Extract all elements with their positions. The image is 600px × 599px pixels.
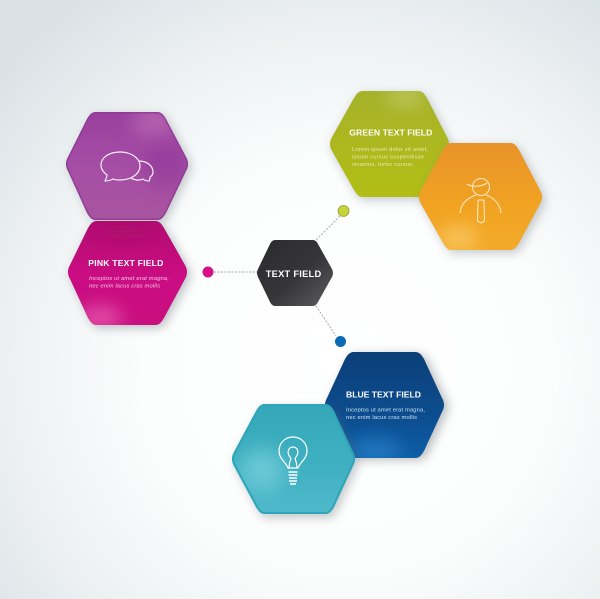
icon: man with tie — [460, 178, 501, 223]
panel: green hexagon — [330, 87, 451, 200]
panel: blue hexagon — [325, 352, 448, 462]
panel: pink hexagon — [68, 221, 190, 330]
panel: purple hexagon — [66, 106, 191, 223]
panel: central dark hexagon — [257, 240, 333, 306]
connector: pink — [214, 271, 258, 273]
text block: green — [352, 147, 428, 168]
dot: blue — [335, 336, 346, 347]
text block: green: Lorem ipsum dolor sit amet, — [352, 147, 428, 153]
dot: green — [338, 206, 349, 216]
panel: orange hexagon — [419, 143, 545, 253]
icon: speech bubbles — [101, 152, 153, 181]
connector: green — [316, 216, 340, 240]
text block: pink: Inceptos ut amet erat magna, — [89, 276, 169, 282]
icon: light bulb — [279, 437, 307, 484]
text block: blue: nec enim lacus cras mollis — [346, 415, 417, 421]
dot: pink — [202, 266, 214, 278]
text block: green: ipsum cursus suspendisse — [352, 154, 424, 160]
heading: blue text field: BLUE TEXT FIELD — [346, 389, 421, 399]
text block: green: vivamus, tortor cursus. — [352, 162, 414, 168]
text block: pink — [89, 276, 169, 290]
connector: blue — [316, 306, 336, 336]
text block: pink: nec enim lacus cras mollis — [89, 284, 160, 290]
text block: blue: Inceptos ut amet erat magna, — [346, 408, 425, 414]
panel: teal hexagon — [232, 404, 358, 518]
heading: central text field: TEXT FIELD — [266, 269, 321, 279]
heading: pink text field: PINK TEXT FIELD — [88, 258, 163, 268]
heading: green text field: GREEN TEXT FIELD — [349, 127, 432, 137]
text block: blue — [346, 408, 425, 421]
